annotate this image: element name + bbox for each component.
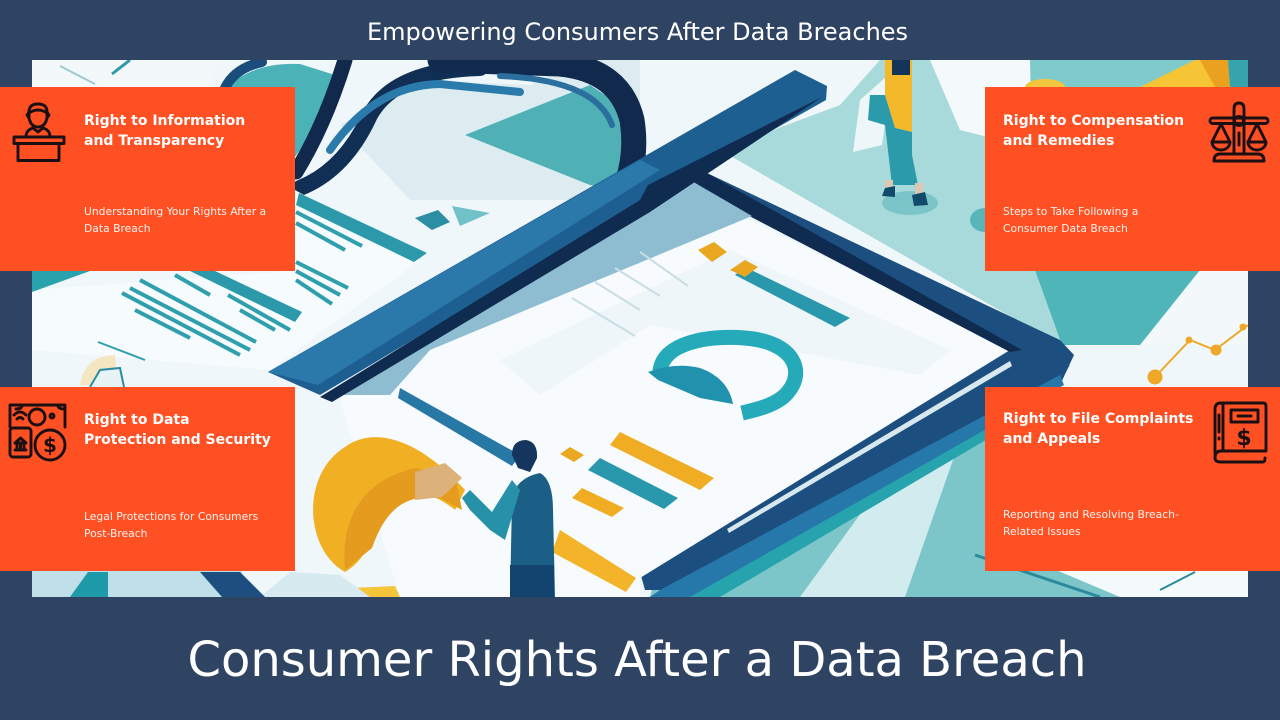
description: Reporting and Resolving Breach- xyxy=(1003,508,1179,521)
icon: banknote, banking phone and coin: $ xyxy=(43,433,57,457)
description xyxy=(84,205,266,235)
yellow shape top right xyxy=(1025,60,1248,95)
tablet device xyxy=(340,165,1248,597)
long blue bar xyxy=(268,70,827,466)
heading xyxy=(1003,112,1184,148)
description xyxy=(84,510,258,540)
heading: and Remedies xyxy=(1003,132,1114,148)
subtitle: Empowering Consumers After Data Breaches xyxy=(367,18,908,46)
lower right details xyxy=(975,555,1195,597)
lower left details xyxy=(32,342,265,597)
description: Legal Protections for Consumers xyxy=(84,510,258,523)
description: Consumer Data Breach xyxy=(1003,222,1128,235)
icon: scales of justice xyxy=(1208,102,1270,162)
panel: right to compensation xyxy=(985,87,1280,271)
heading xyxy=(84,412,271,448)
bar chart near person xyxy=(552,432,714,592)
heading: Protection and Security xyxy=(84,432,271,448)
line chart right xyxy=(1148,324,1248,384)
icon: banknote, banking phone and coin xyxy=(8,404,66,462)
icon: book with dollar sign xyxy=(1214,402,1268,464)
heading: Right to Data xyxy=(84,412,190,428)
yellow arch xyxy=(260,437,465,597)
panel: right to data protection xyxy=(0,387,295,571)
main title: Consumer Rights After a Data Breach xyxy=(187,632,1087,688)
description: Related Issues xyxy=(1003,525,1081,538)
gauge chart xyxy=(648,337,796,413)
icon: speaker at podium xyxy=(12,102,66,162)
description xyxy=(1003,205,1138,235)
teal bar with orange cap xyxy=(572,242,850,336)
heading xyxy=(1003,410,1193,446)
description: Post-Breach xyxy=(84,527,147,540)
description xyxy=(1003,508,1179,538)
heading xyxy=(84,112,245,148)
description: Data Breach xyxy=(84,222,151,235)
left document with stripes xyxy=(32,190,490,370)
stethoscope style loop xyxy=(225,60,640,215)
icon: book with dollar sign: $ xyxy=(1236,426,1252,451)
person with paper xyxy=(853,60,938,215)
heading: and Appeals xyxy=(1003,430,1100,446)
description: Steps to Take Following a xyxy=(1003,205,1138,218)
pale teal desk area xyxy=(720,60,1248,345)
panel: right to file complaints xyxy=(985,387,1280,571)
top left sheet xyxy=(32,60,335,270)
heading: Right to Information xyxy=(84,112,245,128)
person with chart xyxy=(462,440,555,597)
description: Understanding Your Rights After a xyxy=(84,205,266,218)
heading: Right to File Complaints xyxy=(1003,410,1193,426)
background illustration: data dashboard xyxy=(32,60,1248,597)
heading: and Transparency xyxy=(84,132,224,148)
heading: Right to Compensation xyxy=(1003,112,1184,128)
panel: right to information xyxy=(0,87,295,271)
